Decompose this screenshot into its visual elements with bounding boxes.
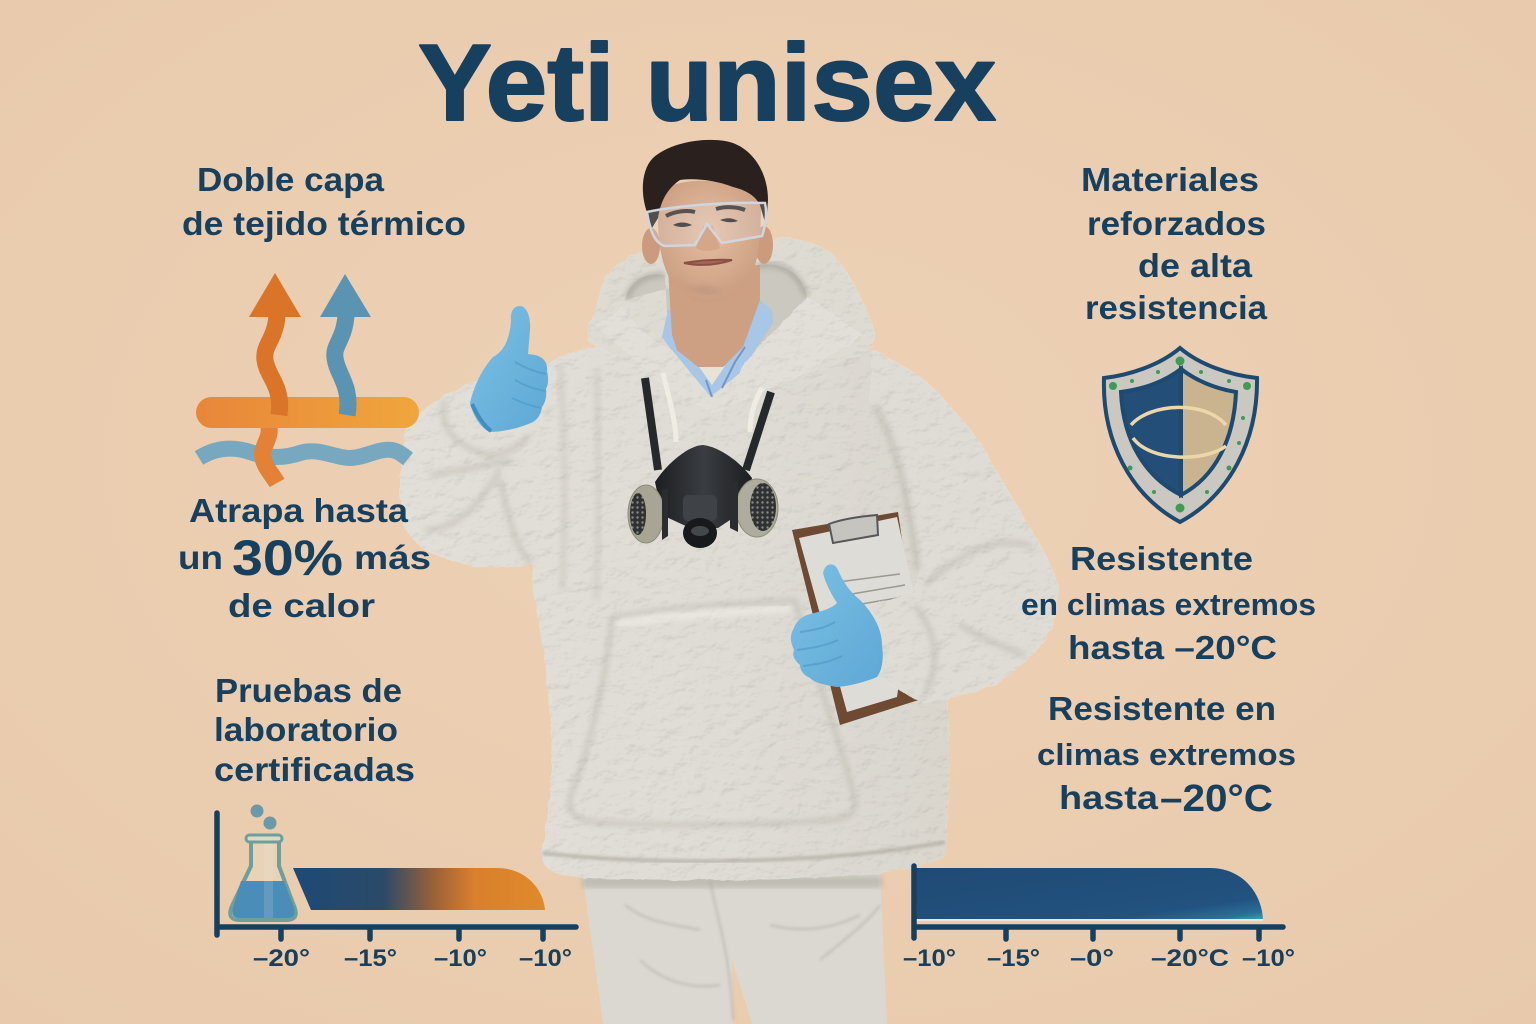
text block: atrapa hasta 30%: de calor (228, 587, 375, 624)
neck (668, 265, 760, 367)
text block: doble capa (182, 161, 466, 242)
blue bar right (914, 868, 1263, 919)
text block: resistente 1: hasta –20°C (1068, 629, 1277, 666)
text block: resistente 1: en climas extremos (1021, 587, 1316, 622)
icon: heat arrows through fabric layer (196, 273, 419, 483)
glove right hand (791, 564, 883, 687)
axis labels left: –10° (519, 945, 572, 972)
text block: materiales reforzados: Materiales (1081, 161, 1259, 198)
chart: temperature bar right (903, 866, 1295, 972)
text block: resistente 2: hasta (1059, 779, 1159, 816)
text block: materiales reforzados: reforzados (1087, 205, 1266, 242)
ears (642, 226, 773, 264)
text block: materiales reforzados: de alta (1138, 247, 1253, 284)
hoodie folds and pocket (425, 365, 945, 861)
text block: pruebas de laboratorio: laboratorio (214, 711, 398, 748)
straps (645, 373, 771, 470)
glove left hand thumbs up (470, 306, 548, 432)
shirt collar (662, 300, 773, 397)
safety goggles (647, 203, 766, 246)
hood front folds (596, 297, 862, 413)
axis labels left: –10° (434, 945, 487, 972)
icon: shield (1104, 348, 1257, 522)
text block: resistente 2 (1037, 690, 1296, 820)
axis labels right (903, 945, 1295, 972)
text block: atrapa hasta 30%: más (354, 539, 431, 576)
chart: laboratory temperature bar (217, 804, 576, 972)
right sleeve (867, 350, 1058, 702)
text block: pruebas de laboratorio: certificadas (214, 751, 415, 788)
nose (696, 226, 720, 251)
head (642, 140, 773, 303)
pants (582, 872, 887, 1024)
axis labels right: –10° (1242, 945, 1295, 972)
axis labels left: –15° (344, 945, 397, 972)
text block: pruebas de laboratorio (214, 672, 415, 788)
mouth (684, 260, 732, 265)
text block: atrapa hasta 30%: Atrapa hasta (189, 492, 409, 529)
text block: resistente 2: Resistente en (1048, 690, 1276, 727)
text block: materiales reforzados (1081, 161, 1268, 326)
axis labels left (253, 945, 572, 972)
axis labels right: –0° (1070, 945, 1114, 972)
clipboard (792, 512, 925, 725)
text block: doble capa: Doble capa (197, 161, 385, 198)
text block: resistente 2: –20°C (1160, 778, 1273, 820)
axis labels left: –20° (253, 945, 310, 972)
axis labels right: –10° (903, 945, 956, 972)
hood (587, 237, 875, 413)
title: Yeti unisex (418, 22, 996, 144)
axis labels right: –20°C (1151, 945, 1229, 972)
person in fleece hoodie (400, 140, 1058, 1024)
text block: pruebas de laboratorio: Pruebas de (215, 672, 402, 709)
text block: resistente 2: climas extremos (1037, 737, 1296, 772)
text block: materiales reforzados: resistencia (1085, 289, 1268, 326)
text block: atrapa hasta 30% (178, 492, 431, 624)
respirator mask (628, 445, 778, 548)
axis labels right: –15° (987, 945, 1040, 972)
icon: flask (230, 804, 296, 920)
sleeve folds (875, 405, 1030, 695)
gradient bar left (293, 868, 545, 910)
filter cartridges (628, 479, 778, 543)
hoodie body and left sleeve (400, 347, 949, 880)
hair (643, 140, 768, 228)
eyes (673, 218, 738, 227)
eyebrows (666, 207, 745, 216)
text block: atrapa hasta 30%: 30% (232, 530, 343, 586)
text block: atrapa hasta 30%: un (178, 539, 223, 576)
text block: doble capa: de tejido térmico (182, 205, 466, 242)
face (658, 181, 761, 303)
text block: resistente 1 (1021, 540, 1316, 666)
text block: resistente 1: Resistente (1070, 540, 1253, 577)
